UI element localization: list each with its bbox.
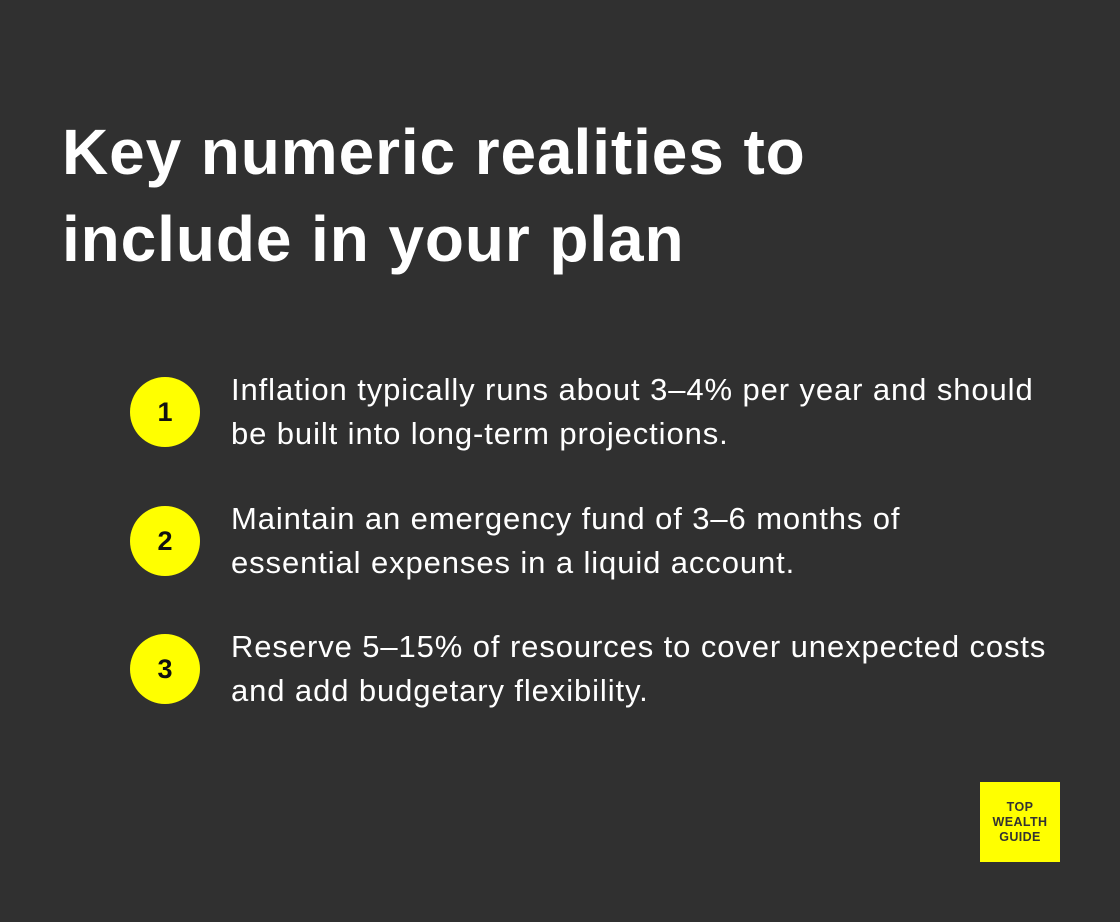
- logo: GUIDE: [999, 830, 1041, 844]
- title: [62, 116, 806, 275]
- logo: WEALTH: [993, 814, 1047, 828]
- icon: number 2: [130, 506, 200, 576]
- icon: number 1: 1: [157, 397, 173, 427]
- item 3: [130, 629, 1046, 708]
- icon: number 2: 2: [157, 526, 173, 556]
- text 2: essential expenses in a liquid account.: [231, 545, 795, 580]
- text 1: be built into long-term projections.: [231, 416, 729, 451]
- item 2: [130, 501, 900, 580]
- item 1: [130, 372, 1034, 451]
- text 2: [231, 501, 900, 580]
- text 3: and add budgetary flexibility.: [231, 673, 649, 708]
- logo: TOP: [1007, 800, 1033, 814]
- text 1: [231, 372, 1034, 451]
- title: include in your plan: [62, 203, 684, 275]
- icon: number 1: [130, 377, 200, 447]
- title: Key numeric realities to: [62, 116, 806, 188]
- logo: [980, 782, 1060, 862]
- icon: number 3: [130, 634, 200, 704]
- text 3: [231, 629, 1046, 708]
- icon: number 3: 3: [157, 654, 173, 684]
- text 1: Inflation typically runs about 3–4% per year and should: [231, 372, 1034, 407]
- text 3: Reserve 5–15% of resources to cover unexpected costs: [231, 629, 1046, 664]
- text 2: Maintain an emergency fund of 3–6 months of: [231, 501, 900, 536]
